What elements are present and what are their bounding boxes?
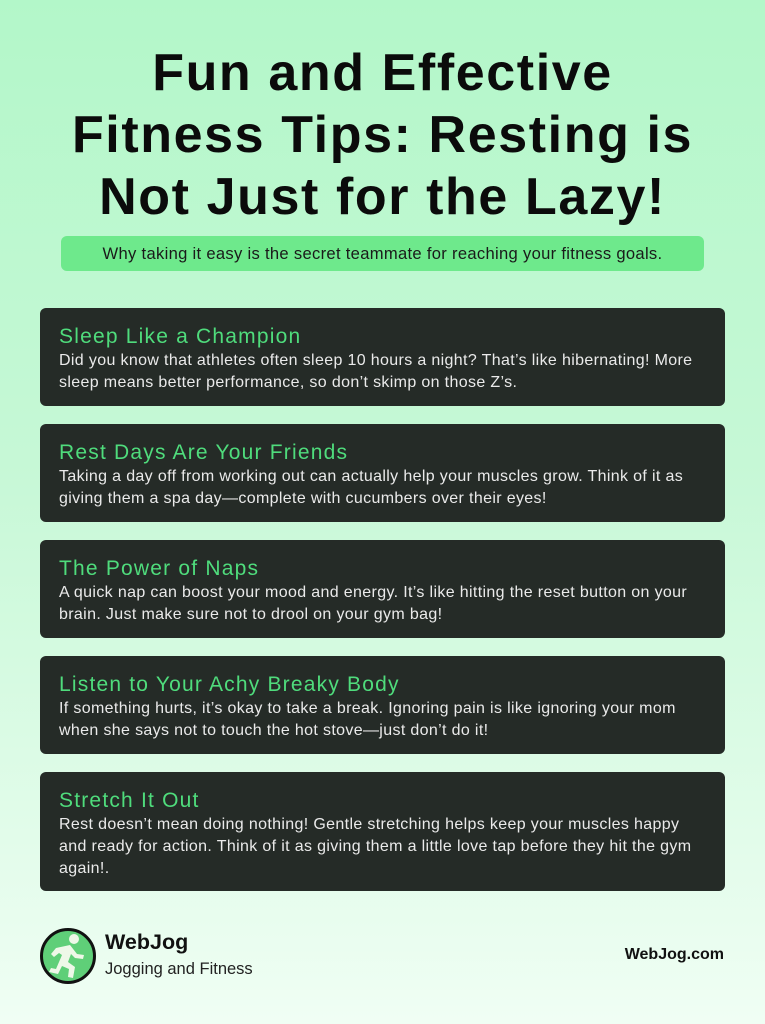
panel: rest days: Rest Days Are Your Friends [59,441,348,464]
panel: listen [40,656,725,754]
title: Fitness Tips: Resting is [72,106,693,164]
panel: naps: A quick nap can boost your mood and energy. It’s like hitting the reset button on your brain. Just make sure not to drool on your gym bag! [59,584,687,623]
panel: stretch [40,772,725,891]
panel: naps [40,540,725,638]
brand text [105,930,253,978]
icon: logo [40,928,96,984]
panel: sleep [40,308,725,406]
subtitle pill: Why taking it easy is the secret teammate for reaching your fitness goals. [103,244,662,263]
brand text: Jogging and Fitness [105,960,253,978]
title: Not Just for the Lazy! [99,168,666,226]
subtitle pill [61,236,704,271]
panel: sleep: Sleep Like a Champion [59,325,301,348]
panel: stretch: Stretch It Out [59,789,200,812]
panel: listen: If something hurts, it’s okay to take a break. Ignoring pain is like ignoring your mom when she says not to touch the hot stove—just don’t do it! [59,700,676,739]
panel: naps: The Power of Naps [59,557,259,580]
title: Fun and Effective [152,44,613,102]
title [72,44,693,226]
panel: sleep: Did you know that athletes often sleep 10 hours a night? That’s like hibernating! More sleep means better performance, so don’t skimp on those Z’s. [59,352,692,391]
panel: listen: Listen to Your Achy Breaky Body [59,673,400,696]
website: WebJog.com [625,946,724,963]
panel: rest days: Taking a day off from working out can actually help your muscles grow. Think of it as giving them a spa day—complete with cucumbers over their eyes! [59,468,683,507]
panel: stretch: Rest doesn’t mean doing nothing! Gentle stretching helps keep your muscles happy and ready for action. Think of it as giving them a little love tap before they hit the gym again!. [59,816,691,877]
panel: rest days [40,424,725,522]
brand text: WebJog [105,930,188,954]
